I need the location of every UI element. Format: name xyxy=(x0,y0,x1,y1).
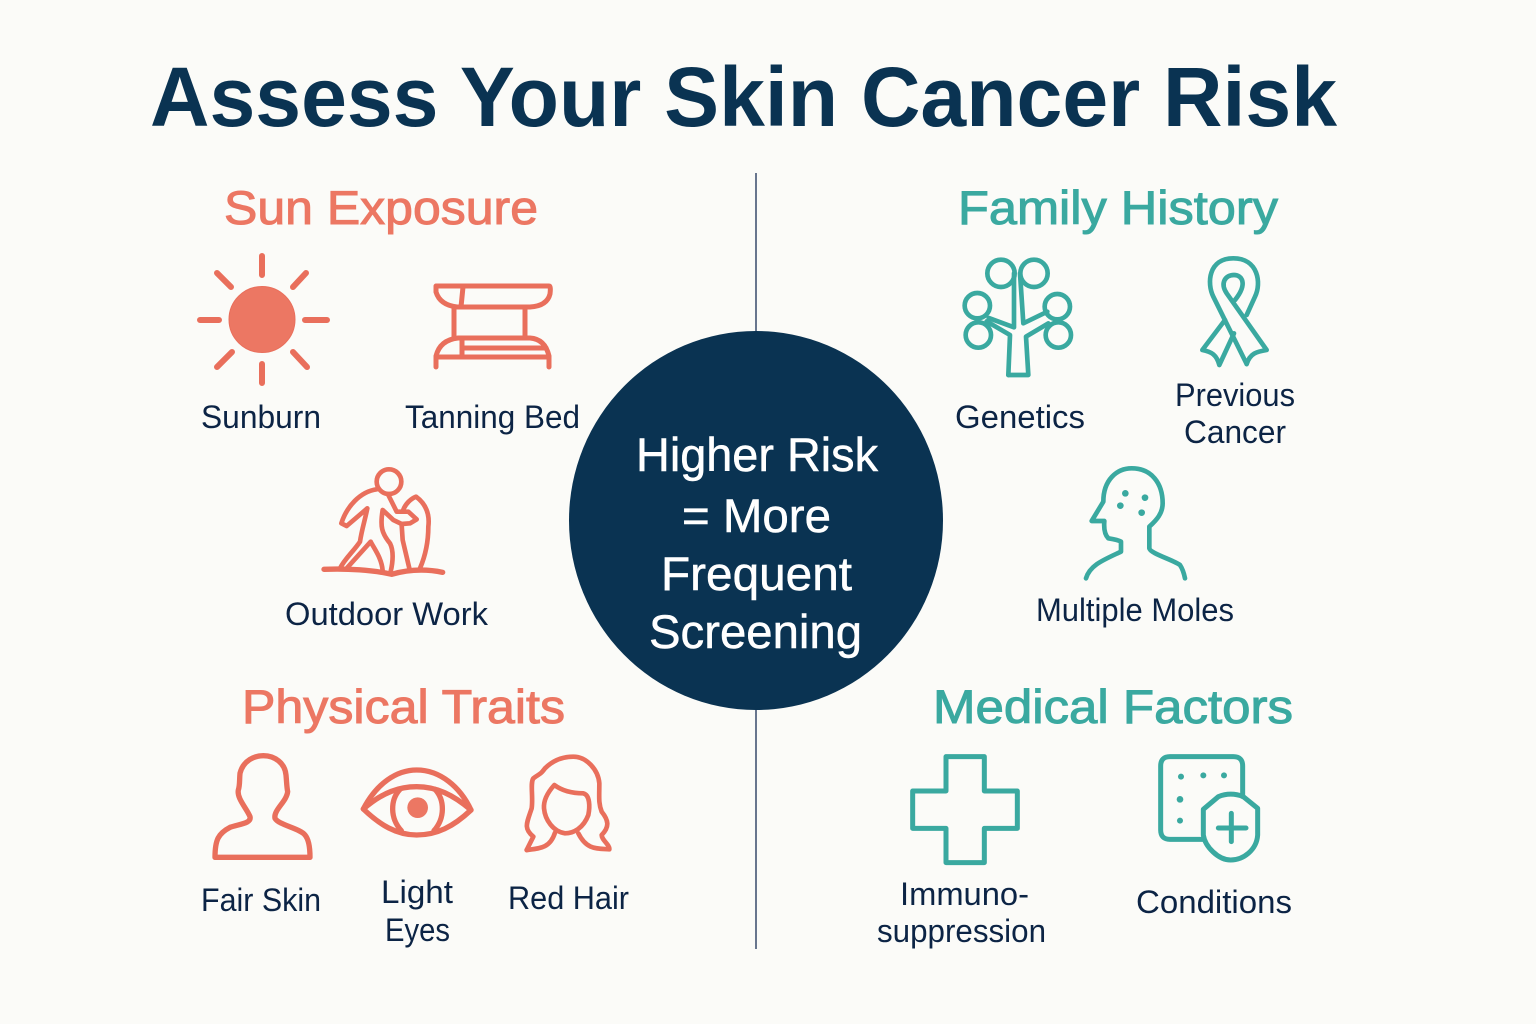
heading: sun exposure: Sun Exposure xyxy=(224,181,538,234)
icon: medical cross xyxy=(913,757,1017,863)
center circle callout: Screening xyxy=(649,605,862,658)
center circle callout: Frequent xyxy=(661,547,852,600)
label: red hair: Red Hair xyxy=(508,880,629,916)
label: previous cancer xyxy=(1175,377,1295,450)
heading: medical factors: Medical Factors xyxy=(933,680,1293,733)
label: immunosuppression: Immuno- xyxy=(900,876,1029,912)
label: conditions: Conditions xyxy=(1136,884,1292,920)
icon: eye xyxy=(363,770,471,835)
label: tanning bed: Tanning Bed xyxy=(405,399,580,435)
icon: head with moles xyxy=(1086,468,1185,578)
label: light eyes: Eyes xyxy=(385,912,450,948)
label: multiple moles: Multiple Moles xyxy=(1036,592,1234,628)
label: sunburn: Sunburn xyxy=(201,399,321,435)
panel: sun exposure xyxy=(200,181,580,632)
panel: medical factors xyxy=(877,680,1293,949)
center circle callout xyxy=(569,331,943,710)
label: immunosuppression: suppression xyxy=(877,913,1046,949)
icon: awareness ribbon xyxy=(1202,258,1267,365)
label: genetics: Genetics xyxy=(955,399,1085,435)
center circle callout: = More xyxy=(682,489,831,542)
label: previous cancer: Cancer xyxy=(1184,414,1286,450)
center circle callout: Higher Risk xyxy=(636,428,878,481)
label: fair skin: Fair Skin xyxy=(201,882,321,918)
icon: genetics tree xyxy=(965,260,1071,375)
label: light eyes xyxy=(381,874,453,948)
label: light eyes: Light xyxy=(381,874,453,910)
panel: family history xyxy=(955,181,1295,628)
title: Assess Your Skin Cancer Risk xyxy=(150,50,1337,144)
label: previous cancer: Previous xyxy=(1175,377,1295,413)
label: outdoor work: Outdoor Work xyxy=(285,596,489,632)
icon: red hair xyxy=(527,757,609,850)
heading: physical traits: Physical Traits xyxy=(242,680,565,733)
icon: sun xyxy=(200,256,327,383)
icon: tanning bed xyxy=(436,286,550,367)
label: immunosuppression xyxy=(877,876,1046,949)
panel: physical traits xyxy=(201,680,629,948)
icon: fair skin silhouette xyxy=(215,756,310,857)
heading: family history: Family History xyxy=(958,181,1279,234)
icon: conditions chart with shield xyxy=(1161,757,1258,860)
icon: outdoor worker xyxy=(324,469,443,574)
